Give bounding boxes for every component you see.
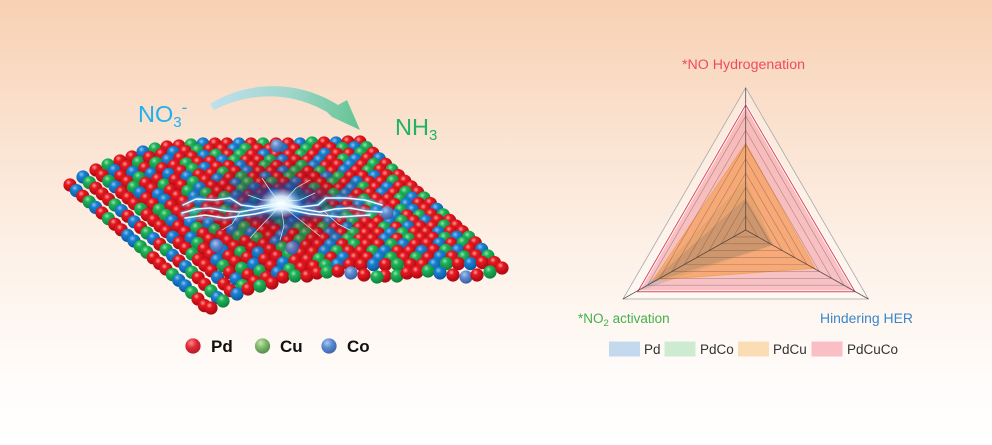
legend item: PdCo bbox=[664, 342, 734, 357]
radar outer frame bbox=[623, 88, 868, 299]
panel: radar chart bbox=[578, 57, 913, 357]
legend item: PdCuCo: PdCuCo bbox=[847, 342, 898, 357]
arrow: NO3- to NH3 bbox=[210, 86, 360, 130]
series: PdCo bbox=[642, 180, 773, 290]
atom sheet bbox=[63, 135, 509, 315]
series: PdCu bbox=[653, 143, 815, 280]
radar grid rings and spokes bbox=[623, 88, 868, 299]
legend item: Pd: Pd bbox=[644, 342, 661, 357]
axis label: NO2 activation: *NO bbox=[578, 311, 604, 326]
legend item: Pd bbox=[185, 337, 233, 356]
legend item: PdCuCo bbox=[812, 342, 898, 357]
axis label: NO hydrogenation: *NO Hydrogenation bbox=[682, 57, 805, 72]
label: NO3- reactant: NO bbox=[138, 101, 173, 127]
legend item: Co: Co bbox=[347, 337, 370, 356]
legend item: Cu: Cu bbox=[280, 337, 303, 356]
axis label: Hindering HER: Hindering HER bbox=[820, 311, 913, 326]
icon: lightning discharge bbox=[182, 178, 382, 240]
series: PdCuCo bbox=[638, 105, 855, 292]
label: NO3- reactant: - bbox=[182, 98, 187, 117]
label: NH3 product: 3 bbox=[429, 127, 437, 144]
legend item: PdCu: PdCu bbox=[773, 342, 807, 357]
legend item: Cu bbox=[255, 337, 303, 356]
axis label: NO2 activation: activation bbox=[609, 311, 670, 326]
legend item: PdCo: PdCo bbox=[700, 342, 734, 357]
dark halo around discharge bbox=[186, 153, 376, 257]
legend: atom types bbox=[185, 337, 370, 356]
chart legend bbox=[609, 342, 898, 357]
legend item: Pd: Pd bbox=[211, 337, 233, 356]
legend item: Co bbox=[321, 337, 370, 356]
legend item: Pd bbox=[609, 342, 661, 357]
series outline: PdCuCo bbox=[638, 105, 855, 292]
panel: catalyst reaction illustration bbox=[63, 86, 509, 356]
axis label: NO2 activation: 2 bbox=[604, 318, 609, 329]
label: NO3- reactant: 3 bbox=[173, 114, 182, 131]
label: NH3 product: NH bbox=[395, 114, 429, 140]
series: Pd bbox=[650, 198, 773, 283]
legend item: PdCu bbox=[738, 342, 807, 357]
